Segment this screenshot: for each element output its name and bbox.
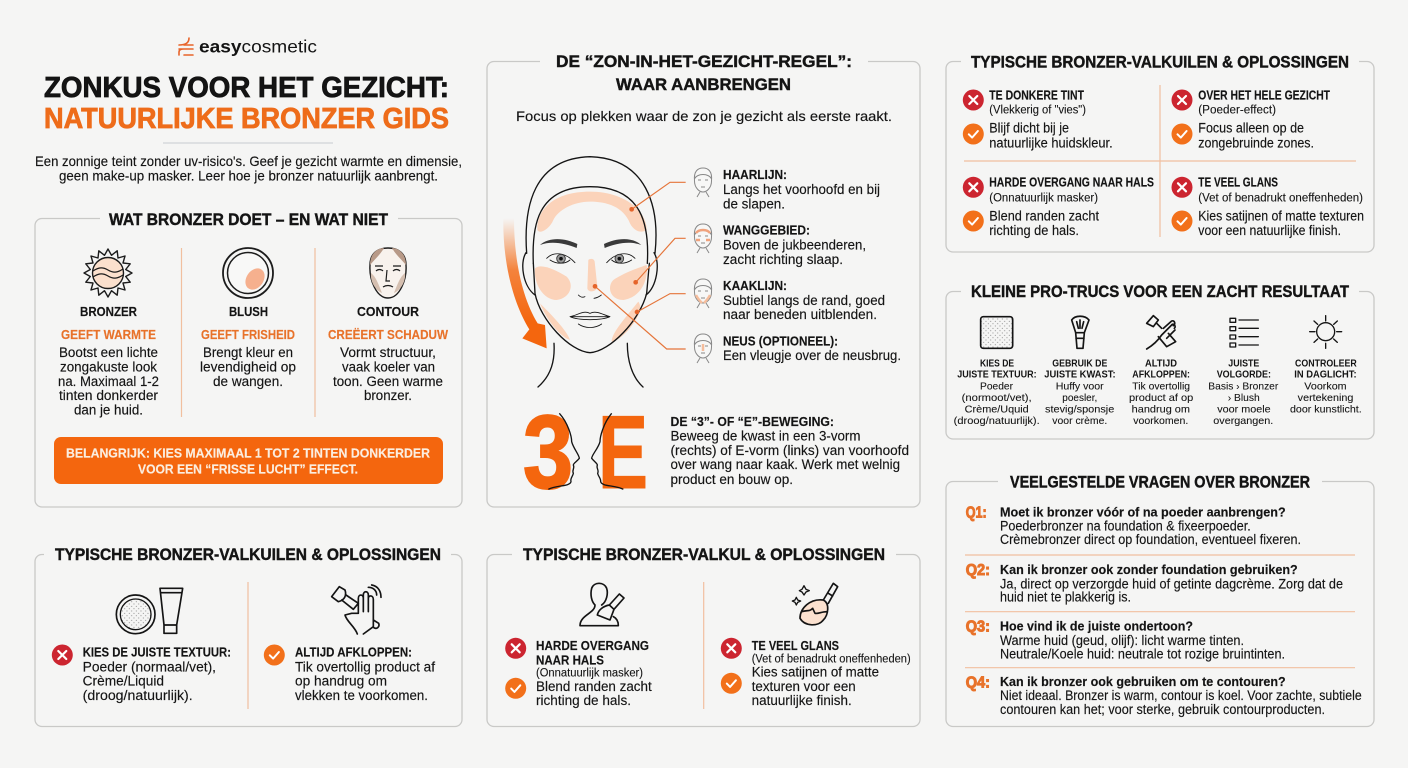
- tip: juiste volgorde: overgangen.: [1213, 415, 1273, 427]
- tip: juiste volgorde: [1208, 358, 1279, 427]
- zone label: kaaklijn: KAAKLIJN:: [723, 279, 787, 293]
- column: blush: [200, 305, 296, 389]
- tip: juiste volgorde: voor moele: [1217, 403, 1271, 415]
- panel: valkuilen rechts boven: [946, 52, 1374, 252]
- question 2: [966, 562, 1343, 605]
- title: [44, 72, 449, 135]
- column: blush: GEEFT FRISHEID: [201, 328, 295, 342]
- text: juiste textuur: Poeder (normaal/vet),: [83, 660, 216, 675]
- question 1: Q1:: [966, 505, 987, 522]
- text: te veel glans: [752, 639, 911, 708]
- text: 3 of E beweging: Beweeg de kwast in een 3-vorm: [670, 429, 860, 444]
- logo wordmark: easycosmetic: [199, 36, 317, 56]
- column: contour: [328, 305, 448, 403]
- zone label: wanggebied: WANGGEBIED:: [723, 223, 810, 237]
- subtitle: Focus op plekken waar de zon je gezicht als eerste raakt.: [516, 108, 892, 124]
- column: bronzer: na. Maximaal 1-2: [58, 374, 159, 389]
- zone label: kaaklijn: [723, 279, 885, 322]
- cell: te veel glans: TE VEEL GLANS: [1198, 176, 1278, 190]
- text: altijd afkloppen: op handrug om: [295, 674, 387, 689]
- question 1: Moet ik bronzer vóór of na poeder aanbrengen?: [1000, 506, 1286, 520]
- text: altijd afkloppen: Tik overtollig product af: [295, 660, 435, 675]
- cell: over het hele gezicht: Focus alleen op de: [1198, 121, 1304, 136]
- tip: juiste textuur: [954, 358, 1040, 427]
- cell: te veel glans: Kies satijnen of matte texturen: [1198, 209, 1364, 224]
- heading: TYPISCHE BRONZER-VALKUL & OPLOSSINGEN: [523, 545, 885, 564]
- intro text: [35, 153, 462, 184]
- cell: te donkere tint: (Vlekkerig of "vies"): [989, 104, 1086, 116]
- tip: controleer in daglicht: Voorkom: [1304, 380, 1347, 392]
- question 2: Kan ik bronzer ook zonder foundation gebruiken?: [1000, 563, 1298, 577]
- question 2: Q2:: [966, 562, 990, 579]
- question 2: huid niet te plakkerig is.: [1000, 590, 1131, 605]
- question 3: Q3:: [966, 619, 990, 636]
- tip: altijd afkloppen: AFKLOPPEN:: [1132, 369, 1190, 381]
- question 4: Q4:: [966, 674, 990, 691]
- text: harde overgang: NAAR HALS: [536, 653, 604, 667]
- column: blush: BLUSH: [229, 305, 268, 319]
- panel: valkuil midden onder: [487, 545, 920, 726]
- cell: harde overgang naar hals: [963, 176, 1154, 238]
- 3 and E motion graphic: E: [598, 395, 648, 511]
- column: blush: de wangen.: [213, 374, 283, 389]
- zone label: kaaklijn: Subtiel langs de rand, goed: [723, 293, 885, 308]
- icon: check: [721, 673, 742, 694]
- text: 3 of E beweging: over wang naar kaak. Werk met welnig: [670, 457, 900, 472]
- heading: [556, 52, 852, 94]
- icon: cross: [52, 644, 73, 666]
- cell: harde overgang naar hals: (Onnatuurlijk masker): [989, 193, 1098, 205]
- icon: hand tapping brush: [332, 585, 381, 634]
- cell: te donkere tint: [963, 88, 1113, 150]
- question 1: [966, 505, 1301, 547]
- text: te veel glans: (Vet of benadrukt oneffenheden): [752, 653, 911, 665]
- tip: altijd afkloppen: Tik overtollig: [1132, 380, 1190, 392]
- question 4: Kan ik bronzer ook gebruiken om te contouren?: [1000, 675, 1286, 689]
- icon: bronzer sun: [84, 249, 132, 297]
- text: juiste textuur: KIES DE JUISTE TEXTUUR:: [83, 646, 231, 660]
- text: te veel glans: natuurlijke finish.: [752, 693, 852, 708]
- callout: belangrijk: BELANGRIJK: KIES MAXIMAAL 1 TOT 2 TINTEN DONKERDER: [66, 447, 430, 461]
- text: altijd afkloppen: ALTIJD AFKLOPPEN:: [295, 646, 412, 660]
- tip: controleer in daglicht: IN DAGLICHT:: [1294, 369, 1357, 381]
- title: ZONKUS VOOR HET GEZICHT:: [44, 72, 449, 104]
- icons row: [981, 316, 1342, 349]
- text: harde overgang: Blend randen zacht: [536, 679, 652, 694]
- cell: te veel glans: [1172, 176, 1364, 238]
- text: 3 of E beweging: [670, 415, 909, 487]
- icon: person with brush: [580, 583, 624, 626]
- heading: VEELGESTELDE VRAGEN OVER BRONZER: [1010, 472, 1310, 491]
- tip: juiste kwast: [1044, 358, 1116, 427]
- tip: juiste kwast: Huffy voor: [1056, 380, 1104, 392]
- tip: controleer in daglicht: vertekening: [1298, 392, 1354, 404]
- 3 and E motion graphic: [523, 395, 648, 511]
- cell: harde overgang naar hals: HARDE OVERGANG NAAR HALS: [989, 176, 1154, 190]
- column: bronzer: Bootst een lichte: [59, 345, 158, 360]
- icon: compact and tube: [116, 588, 183, 634]
- tip: altijd afkloppen: voorkomen.: [1133, 415, 1188, 427]
- panel: pro-trucs: [946, 282, 1374, 439]
- icon: mini face wanggebied: [694, 224, 712, 253]
- leader lines: [595, 182, 686, 349]
- question 3: Warme huid (geud, olijf): licht warme tinten.: [1000, 633, 1244, 648]
- heading: DE “ZON-IN-HET-GEZICHT-REGEL”:: [556, 52, 852, 71]
- tip: juiste textuur: KIES DE: [980, 358, 1014, 370]
- tip: altijd afkloppen: ALTIJD: [1145, 358, 1177, 370]
- text: 3 of E beweging: DE “3”- OF “E”-BEWEGING:: [670, 415, 834, 429]
- tip: altijd afkloppen: product af op: [1129, 392, 1193, 404]
- zone label: haarlijn: HAARLIJN:: [723, 168, 787, 182]
- zone label: haarlijn: Langs het voorhoofd en bij: [723, 182, 880, 197]
- title: NATUURLIJKE BRONZER GIDS: [44, 103, 449, 135]
- icon: cross: [721, 638, 742, 659]
- text: altijd afkloppen: vlekken te voorkomen.: [295, 688, 428, 703]
- brows, eyes, nose, lips: [540, 239, 641, 327]
- question 4: Niet ideaal. Bronzer is warm, contour is koel. Voor zachte, subtiele: [1000, 688, 1362, 703]
- icon: mini face kaaklijn: [694, 279, 712, 308]
- tip: juiste volgorde: Basis › Bronzer: [1208, 380, 1279, 392]
- heading: WAT BRONZER DOET – EN WAT NIET: [109, 210, 389, 229]
- heading: KLEINE PRO-TRUCS VOOR EEN ZACHT RESULTAAT: [971, 282, 1350, 301]
- cell: harde overgang naar hals: richting de hals.: [989, 223, 1079, 238]
- column: bronzer: BRONZER: [80, 305, 137, 319]
- tip: juiste volgorde: JUISTE: [1228, 358, 1259, 370]
- question 4: [966, 674, 1362, 717]
- icon: brush with sparkles: [792, 583, 838, 625]
- cell: te donkere tint: natuurlijke huidskleur.: [989, 135, 1113, 150]
- text: altijd afkloppen: [295, 646, 435, 703]
- face diagram: [503, 157, 686, 387]
- 3 and E motion graphic: 3: [523, 395, 573, 511]
- icon: mini face haarlijn: [694, 168, 712, 197]
- question 1: Crèmebronzer direct op foundation, eventueel fixeren.: [1000, 532, 1301, 547]
- cell: te donkere tint: TE DONKERE TINT: [989, 88, 1084, 102]
- question 2: Ja, direct op verzorgde huid of getinte dagcrème. Zorg dat de: [1000, 576, 1343, 591]
- panel: veelgestelde vragen: [946, 472, 1374, 726]
- column: bronzer: GEEFT WARMTE: [61, 328, 156, 342]
- column: contour: Vormt structuur,: [340, 345, 436, 360]
- panel: zon-in-het-gezicht-regel: [487, 52, 920, 511]
- tip: altijd afkloppen: [1129, 358, 1193, 427]
- text: juiste textuur: (droog/natuurlijk).: [83, 688, 193, 703]
- tip: altijd afkloppen: handrug om: [1132, 403, 1190, 415]
- column: bronzer: tinten donkerder: [59, 388, 159, 403]
- icon: cross: [505, 638, 526, 659]
- heading: TYPISCHE BRONZER-VALKUILEN & OPLOSSINGEN: [971, 52, 1349, 71]
- callout: belangrijk: VOOR EEN “FRISSE LUCHT” EFFECT.: [138, 462, 358, 476]
- cell: te donkere tint: Blijf dicht bij je: [989, 121, 1069, 136]
- zone label: wanggebied: zacht richting slaap.: [723, 252, 843, 267]
- text: juiste textuur: Crème/Liquid: [83, 674, 164, 689]
- tip: juiste textuur: (droog/natuurlijk).: [954, 415, 1040, 427]
- zone label: wanggebied: Boven de jukbeenderen,: [723, 237, 866, 252]
- tip: controleer in daglicht: CONTROLEER: [1295, 358, 1357, 370]
- column: bronzer: dan je huid.: [74, 402, 143, 418]
- text: harde overgang: [536, 639, 652, 708]
- heading: TYPISCHE BRONZER-VALKUILEN & OPLOSSINGEN: [55, 545, 441, 564]
- heading: WAAR AANBRENGEN: [616, 75, 791, 94]
- cell: over het hele gezicht: zongebruinde zones.: [1198, 135, 1314, 150]
- icon: tapping hand: [1147, 316, 1176, 349]
- zone label: kaaklijn: naar beneden uitblenden.: [723, 307, 877, 322]
- zone label: neus: Een vleugje over de neusbrug.: [723, 348, 901, 363]
- cell: harde overgang naar hals: Blend randen zacht: [989, 209, 1099, 224]
- text: 3 of E beweging: (rechts) of E-vorm (links) van voorhoofd: [670, 443, 909, 458]
- icon: brush: [1072, 316, 1089, 348]
- text: te veel glans: Kies satijnen of matte: [752, 665, 879, 680]
- column: bronzer: [58, 305, 159, 418]
- tip: juiste kwast: stevig/sponsje: [1045, 403, 1114, 415]
- application zones: [535, 192, 647, 342]
- icon: logo mark: [179, 38, 193, 55]
- icon: mini face neus: [694, 334, 712, 363]
- tip: juiste textuur: Crème/Uquid: [965, 403, 1029, 415]
- question 4: contouren kan het; voor sterke, gebruik contourproducten.: [1000, 702, 1325, 717]
- icon: check: [264, 644, 285, 666]
- tip: juiste volgorde: VOLGORDE:: [1217, 369, 1271, 381]
- icon: texture swatch: [981, 317, 1013, 348]
- icon: blush compact: [223, 248, 273, 298]
- panel: wat bronzer doet: [35, 210, 462, 507]
- text: te veel glans: TE VEEL GLANS: [752, 639, 839, 653]
- column: contour: CONTOUR: [357, 305, 419, 319]
- cell: over het hele gezicht: OVER HET HELE GEZICHT: [1198, 88, 1330, 102]
- zone label: neus: NEUS (OPTIONEEL):: [723, 335, 838, 349]
- zone label: neus: [723, 335, 901, 363]
- text: harde overgang: HARDE OVERGANG: [536, 639, 649, 653]
- zone label: haarlijn: [723, 168, 880, 211]
- text: te veel glans: texturen voor een: [752, 679, 856, 694]
- intro text: Een zonnige teint zonder uv-risico's. Geef je gezicht warmte en dimensie,: [35, 153, 462, 169]
- icon: sun: [1310, 316, 1342, 348]
- text: juiste textuur: [83, 646, 231, 703]
- head outline: [523, 157, 657, 387]
- cell: over het hele gezicht: [1172, 88, 1330, 150]
- question 1: Poederbronzer na foundation & fixeerpoeder.: [1000, 519, 1251, 534]
- cell: te veel glans: voor een natuurlijke finish.: [1198, 223, 1341, 238]
- column: contour: bronzer.: [364, 388, 412, 403]
- tip: juiste textuur: (normoot/vet),: [962, 392, 1032, 404]
- column: contour: CREËERT SCHADUW: [328, 327, 448, 342]
- tip: juiste textuur: Poeder: [980, 380, 1013, 392]
- icon: check: [505, 678, 526, 699]
- column: blush: Brengt kleur en: [203, 345, 293, 360]
- zone label: haarlijn: de slapen.: [723, 196, 785, 211]
- cell: over het hele gezicht: (Poeder-effect): [1198, 104, 1276, 116]
- tip: controleer in daglicht: door kunstlicht.: [1290, 403, 1362, 415]
- question 3: [966, 619, 1285, 661]
- tip: juiste volgorde: › Blush: [1228, 392, 1260, 404]
- tip: juiste kwast: poesler,: [1062, 392, 1097, 404]
- column: bronzer: zongakuste look: [60, 360, 157, 375]
- tip: juiste kwast: JUISTE KWAST:: [1044, 369, 1116, 381]
- text: harde overgang: richting de hals.: [536, 693, 631, 708]
- column: contour: toon. Geen warme: [333, 374, 443, 389]
- column: blush: levendigheid op: [200, 360, 296, 375]
- tip: juiste kwast: GEBRUIK DE: [1052, 358, 1107, 370]
- tip: controleer in daglicht: [1290, 358, 1362, 415]
- question 3: Neutrale/Koele huid: neutrale tot rozige bruintinten.: [1000, 646, 1285, 661]
- callout: belangrijk: [54, 437, 443, 484]
- arrow: downward sweep: [503, 218, 547, 348]
- text: 3 of E beweging: product en bouw op.: [670, 472, 793, 487]
- icon: contour face: [370, 248, 406, 298]
- intro text: geen make-up masker. Leer hoe je bronzer natuurlijk aanbrengt.: [59, 168, 438, 184]
- tip: juiste kwast: voor crème.: [1052, 415, 1107, 427]
- text: harde overgang: (Onnatuurlijk masker): [536, 668, 643, 680]
- question 3: Hoe vind ik de juiste ondertoon?: [1000, 620, 1193, 634]
- tip: juiste textuur: JUISTE TEXTUUR:: [957, 369, 1037, 381]
- column: contour: vaak koeler van: [342, 360, 435, 375]
- panel: valkuilen links onder: [35, 545, 462, 726]
- cell: te veel glans: (Vet of benadrukt oneffenheden): [1198, 193, 1363, 205]
- zone label: wanggebied: [723, 223, 866, 267]
- icon: checklist: [1230, 318, 1258, 347]
- logo: easycosmetic: [179, 36, 317, 56]
